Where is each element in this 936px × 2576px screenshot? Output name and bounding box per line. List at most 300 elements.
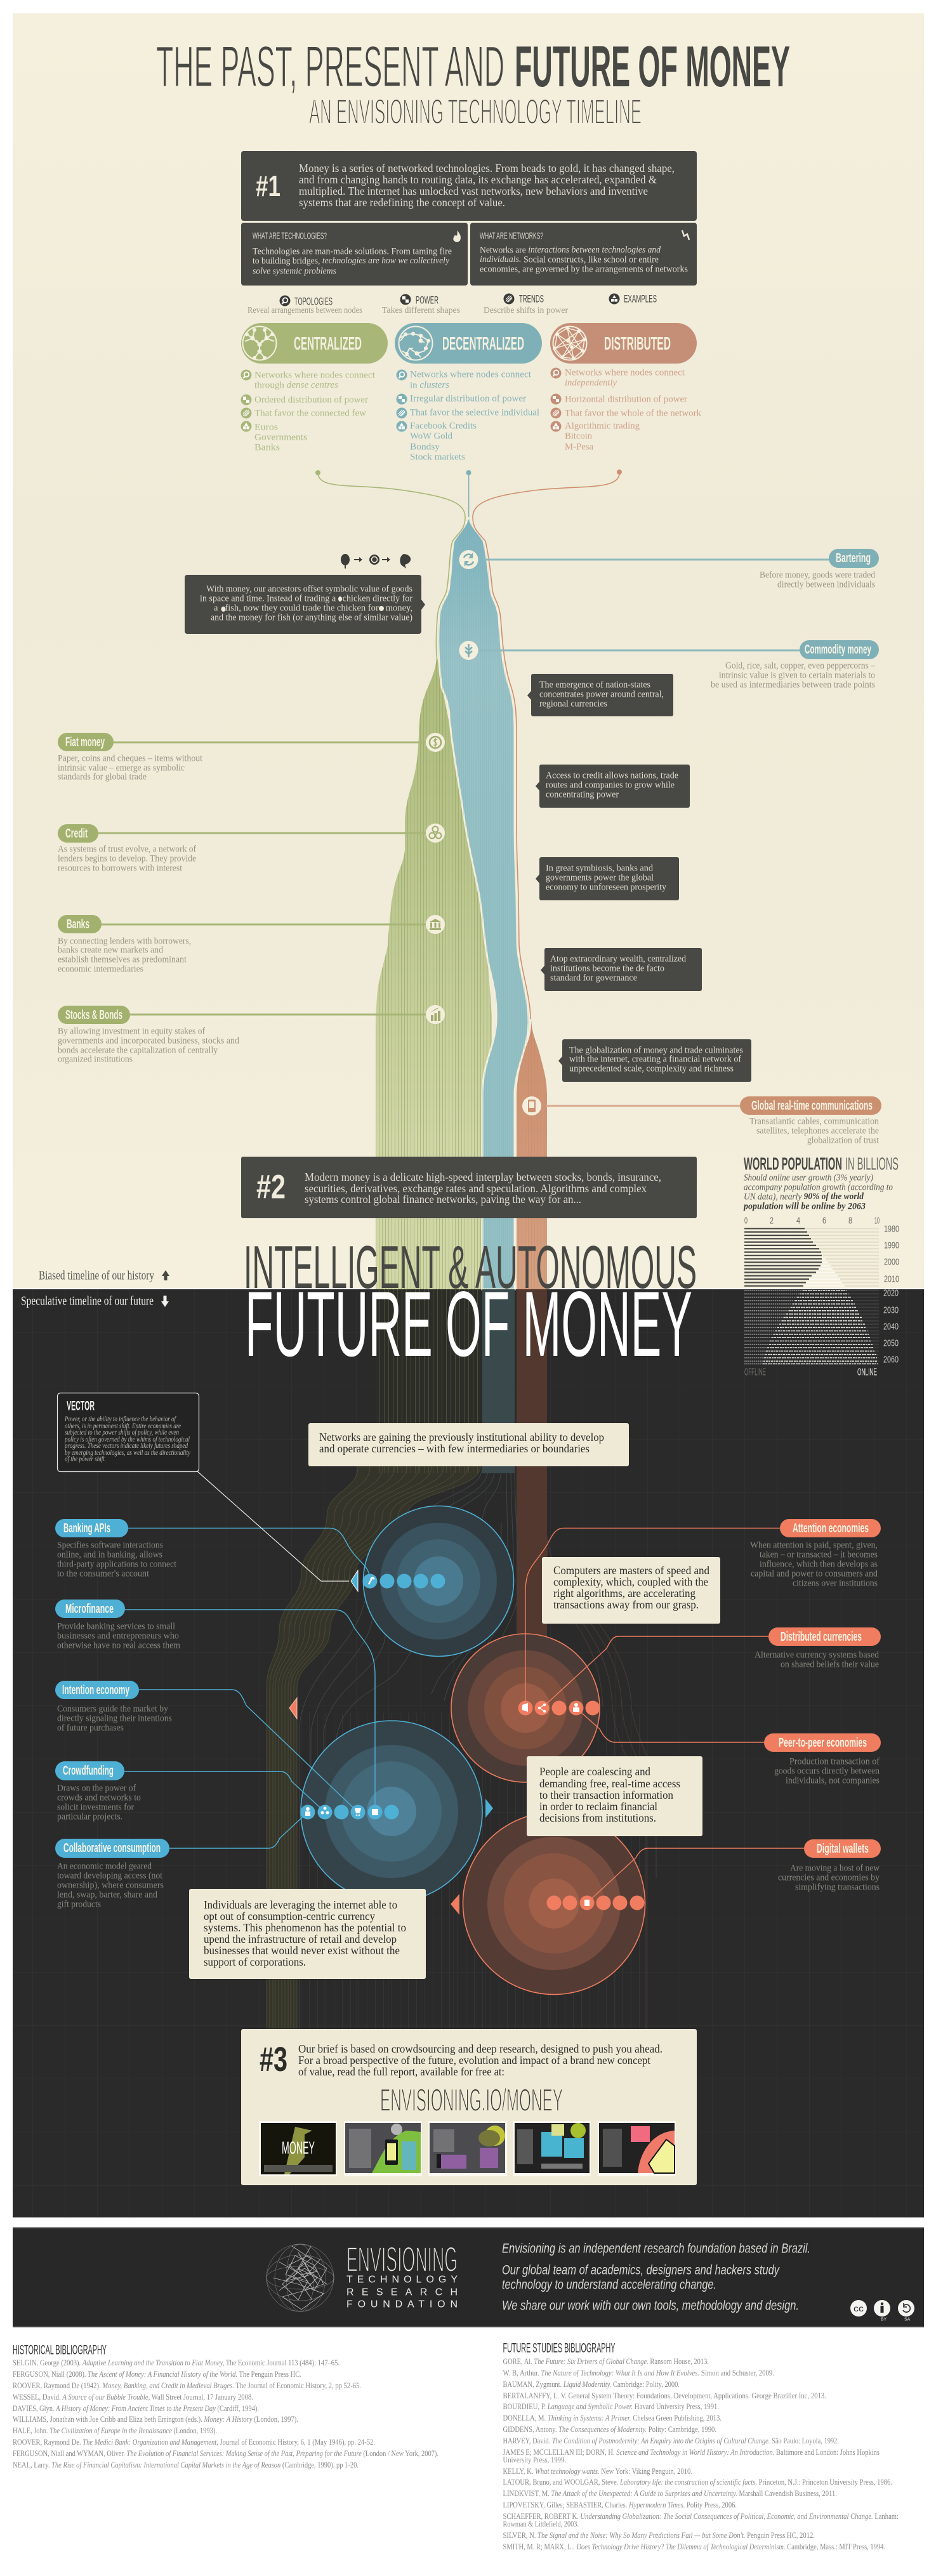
callout: credit access: concentrating power (546, 789, 619, 799)
panel: #2 modern money (241, 1157, 697, 1218)
pill (55, 1519, 128, 1537)
nodes: crowd cluster dots (301, 1804, 399, 1820)
panel: vector explanation: VECTOR (67, 1398, 95, 1414)
icon: flame (453, 230, 461, 242)
description (711, 660, 876, 690)
stream: distributed orange (517, 1019, 547, 1289)
topology pill: distributed (550, 323, 697, 364)
callout: credit access: routes and companies to grow while (546, 780, 675, 790)
list: distributed properties: independently (565, 378, 617, 388)
foundation description (502, 2241, 810, 2313)
year labels (883, 1223, 899, 1365)
icon: chicken, coin, fish exchange (341, 554, 411, 568)
callout: symbolic value: and the money for fish (or anything else of similar value) (211, 612, 412, 622)
panel: vector explanation: Power, or the ability to influence the behavior of (64, 1414, 176, 1423)
panel: vector explanation: subjected to the power shifts of policy, while even (65, 1428, 179, 1436)
panel: footer: ENVISIONING (346, 2239, 458, 2279)
icon: people, cart, target (305, 1807, 378, 1816)
stream: centralized green (376, 654, 492, 1289)
icon: wallet (584, 1900, 590, 1906)
callout: computers (542, 1557, 720, 1624)
bibliography: future studies: GORE, Al. The Future: Six Drivers of Global Change. Ransom House, 2013. (503, 2356, 709, 2366)
heading: #3: #3 (260, 2040, 287, 2079)
foundation description: We share our work with our own tools, methodology and design. (502, 2298, 799, 2313)
logo wordmark: TECHNOLOGY (346, 2274, 458, 2285)
description: Are moving a host of new (790, 1863, 880, 1873)
panel: vector explanation: policy is often governed by the whims of technological (64, 1435, 190, 1443)
description: economic intermediaries (58, 964, 143, 974)
chart description (742, 1173, 893, 1211)
panel: dark background future section (13, 1288, 924, 2218)
legend: topologies, power, trends, examples: EXAMPLES (624, 293, 657, 305)
legend offline online: OFFLINE (744, 1367, 766, 1378)
pill (764, 1733, 881, 1752)
bibliography: future studies: HARVEY, David. The Condition of Postmodernity: An Enquiry into the Origins of Cultural Change. São Paulo: Loyola, 1992. (503, 2436, 839, 2445)
vector arrow left (289, 1698, 297, 1719)
bibliography: future studies: SMITH, M. R; MARX, L.. Does Technology Drive History? The Dilemma of Technological Determinism. Cambridge, Mass.: MIT Press, 1994. (503, 2542, 885, 2551)
description: individuals, not companies (786, 1775, 880, 1785)
axis values: 4 (796, 1216, 800, 1226)
description: banks create new markets and (58, 945, 164, 955)
callout: institutions: Atop extraordinary wealth, centralized (550, 954, 686, 964)
description (58, 844, 196, 873)
intro text: Money is a series of networked technologies. From beads to gold, it has changed shape, (299, 162, 675, 174)
callout: symbiosis: governments power the global (546, 872, 654, 883)
description: ownership), where consumers (57, 1880, 164, 1890)
future item: distributed currencies (755, 1627, 881, 1669)
description (58, 1026, 240, 1064)
panel: paper background past section (13, 13, 924, 1289)
connector lines blue (124, 1528, 375, 1848)
pill: Intention economy (62, 1683, 130, 1697)
year labels: 2010 (884, 1274, 899, 1284)
callout: networks gaining: and operate currencies – with few intermediaries or boundaries (319, 1442, 590, 1455)
topology pill: decentralized (395, 323, 542, 364)
bibliography: future studies: JAMES E; MCCLELLAN III; DORN, H. Science and Technology in World History: An Introduction. Baltimore and London: Johns Hopkins (503, 2447, 880, 2457)
list: decentralized properties: in clusters (410, 380, 449, 390)
icon: bank (426, 915, 445, 934)
milestone: commodity money (459, 640, 879, 690)
description: intrinsic value – emerge as symbolic (58, 763, 185, 773)
history timeline label: Biased timeline of our history (39, 1269, 154, 1283)
future item: peer-to-peer economies (764, 1733, 881, 1785)
axis values: 2 (770, 1216, 774, 1226)
pill (804, 1839, 881, 1858)
panel: #3 call to action: ENVISIONING.IO/MONEY (380, 2082, 563, 2118)
bibliography: historical (13, 2343, 438, 2469)
bibliography: historical: WILLIAMS, Jonathan with Joe Cribb and Eliza beth Errington (eds.). Money: A History (London, 1997). (13, 2414, 298, 2424)
chart title: WORLD POPULATION (744, 1153, 842, 1174)
callout: symbolic value: in space and time. Instead of trading a chicken directly for (200, 593, 412, 603)
bibliography: future studies: LATOUR, Bruno, and WOOLGAR, Steve. Laboratory life: the construction of scientific facts. Princeton, N.J.: Princeton University Press, 1986. (503, 2477, 892, 2487)
pill: Bartering: Bartering (836, 551, 871, 565)
description: goods occurs directly between (774, 1766, 880, 1776)
report text: For a broad perspective of the future, evolution and impact of a brand new concept (298, 2054, 650, 2067)
description: directly signaling their intentions (57, 1713, 172, 1723)
list: decentralized properties: Networks where nodes connect (410, 369, 532, 379)
blue circle: banking cluster (363, 1506, 514, 1656)
milestone: credit (58, 824, 445, 873)
callout: individuals: support of corporations. (204, 1955, 306, 1968)
topology pill: decentralized: DECENTRALIZED (442, 334, 524, 354)
icon: wheat (459, 641, 478, 660)
pill: Digital wallets (817, 1842, 869, 1856)
description: establish themselves as predominant (58, 954, 187, 964)
description: As systems of trust evolve, a network of (58, 844, 196, 854)
callout: symbolic value (185, 575, 425, 634)
dark stream: straight section (376, 1289, 547, 1645)
description: satellites, telephones accelerate the (756, 1126, 879, 1136)
stream: decentralized blue (438, 513, 529, 1289)
bibliography: future studies: Rowman & Littlefield, 2003. (503, 2519, 579, 2528)
heading: #2: #2 (256, 1169, 286, 1206)
thumbnail: phone page (344, 2121, 422, 2176)
list: distributed properties: That favor the whole of the network (565, 408, 701, 418)
description: solicit investments for (57, 1802, 134, 1812)
list: centralized properties: Governments (254, 432, 307, 442)
description: bonds accelerate the capitalization of centrally (58, 1045, 218, 1055)
description: Draws on the power of (57, 1783, 136, 1793)
legend offline online (744, 1367, 877, 1378)
bibliography: historical: NEAL, Larry. The Rise of Financial Capitalism: International Capital Markets in the Age of Reason (Cambridge, 1990). pp 1-20. (13, 2460, 359, 2469)
list: decentralized properties: Stock markets (410, 452, 465, 462)
callout: individuals: Individuals are leveraging the internet able to (204, 1898, 397, 1911)
bibliography: historical: FERGUSON, Niall and WYMAN, Oliver. The Evolution of Financial Services: Making Sense of the Past, Preparing for the Future (London / New York, 2007). (13, 2448, 438, 2458)
online bars (803, 1256, 845, 1286)
description: globalization of trust (807, 1135, 879, 1145)
report text: of value, read the full report, available for free at: (298, 2065, 504, 2078)
panel: what are networks: economies, are governed by the arrangements of networks (480, 264, 688, 274)
bibliography: future studies: FUTURE STUDIES BIBLIOGRAPHY (503, 2341, 616, 2355)
vector arrow right (485, 1799, 493, 1818)
callout: symbiosis: In great symbiosis, banks and (546, 863, 653, 873)
panel: what are technologies: to building bridges, technologies are how we collectively (253, 256, 449, 266)
description (778, 1863, 880, 1892)
callout: networks gaining: Networks are gaining the previously institutional ability to develop (319, 1431, 604, 1443)
bibliography: future studies: SCHAEFFER, ROBERT K. Understanding Globalization: The Social Consequences of Political, Economic, and Environmental Change. Lanham: (503, 2511, 899, 2521)
title: THE PAST, PRESENT AND (156, 35, 504, 99)
offline dotted bars (744, 1291, 803, 1364)
list: distributed properties (551, 367, 701, 452)
legend offline online: ONLINE (857, 1367, 877, 1378)
legend: topologies, power, trends, examples: Takes different shapes (382, 306, 460, 315)
legend: topologies, power, trends, examples: TRENDS (519, 293, 544, 305)
legend: topologies, power, trends, examples: POWER (416, 294, 438, 306)
list: centralized properties: Banks (254, 442, 280, 452)
description: Consumers guide the market by (57, 1704, 169, 1714)
list: decentralized properties: That favor the selective individual (410, 407, 539, 417)
description: taken – or transacted – it becomes (760, 1549, 878, 1560)
thumbnail: blue cards page (513, 2121, 591, 2176)
pill: Fiat money (58, 733, 114, 751)
bibliography: future studies: KELLY, K. What technology wants. New York: Viking Penguin, 2010. (503, 2466, 692, 2476)
year labels: 2030 (883, 1304, 899, 1316)
callout: globalization (558, 1039, 751, 1082)
callout: computers: complexity, which, coupled with the (553, 1575, 708, 1588)
description: directly between individuals (777, 579, 875, 589)
bibliography: future studies: W. B, Arthur. The Nature of Technology: What It Is and How It Evolves. Simon and Schuster, 2009. (503, 2368, 774, 2377)
description (774, 1756, 880, 1785)
panel: intro #1 (241, 151, 697, 221)
dark stream: green lines moving left (267, 1466, 480, 2028)
tracks dark (744, 1291, 879, 1364)
description (57, 1861, 164, 1909)
logo wordmark (346, 2239, 458, 2310)
axis values: 0 (744, 1216, 748, 1226)
pill: Credit: Credit (65, 827, 88, 841)
pill: Fiat money: Fiat money (65, 735, 105, 749)
milestone: global real-time communications (522, 1096, 881, 1145)
panel: what are technologies: Technologies are man-made solutions. From taming fire (253, 246, 452, 256)
description: capital and power to consumers and (751, 1568, 878, 1579)
bibliography: future studies: BAUMAN, Zygmunt. Liquid Modernity. Cambridge: Polity, 2000. (503, 2379, 680, 2389)
bibliography: future studies: BERTALANFFY, L. V. General System Theory: Foundations, Development, Applications. George Braziller Inc, 2013. (503, 2391, 826, 2400)
list: centralized properties: Ordered distribution of power (254, 395, 368, 405)
thumbnail: cover (259, 2121, 337, 2176)
list: distributed properties: M-Pesa (565, 442, 593, 452)
callout: symbiosis (536, 857, 679, 900)
bibliography: future studies: SILVER, N. The Signal and the Noise: Why So Many Predictions Fail — but Some Don't. Penguin Press HC, 2012. (503, 2530, 815, 2540)
foundation description: Our global team of academics, designers and hackers study (502, 2263, 780, 2278)
callout: networks gaining (308, 1423, 629, 1466)
icon: network link (682, 230, 689, 240)
callout: computers: transactions away from our grasp. (553, 1598, 699, 1611)
callout: institutions: standard for governance (550, 973, 637, 983)
description (755, 1650, 880, 1669)
panel: what are networks: Networks are interactions between technologies and (480, 245, 661, 255)
description (57, 1783, 141, 1822)
callout: credit access: Access to credit allows nations, trade (546, 770, 678, 780)
pill (55, 1681, 139, 1699)
bibliography: historical: FERGUSON, Niall (2008). The Ascent of Money: A Financial History of the World. The Penguin Press HC. (13, 2369, 301, 2379)
icon: credit trio (426, 824, 445, 843)
callout: computers: Computers are masters of speed and (553, 1564, 709, 1577)
year labels: 2040 (883, 1321, 899, 1332)
description: of future purchases (57, 1723, 124, 1733)
description: Gold, rice, salt, copper, even peppercorns – (725, 660, 876, 671)
callout: institutions (541, 948, 702, 991)
milestone: stocks and bonds (58, 1005, 445, 1064)
callout: globalization: with the internet, creating a financial network of (569, 1054, 741, 1064)
description: standards for global trade (58, 772, 147, 782)
pill: Commodity money (800, 640, 879, 659)
topology pill: centralized (241, 323, 388, 364)
tracks (744, 1228, 879, 1286)
root: blue line with dot (466, 470, 471, 517)
online dotted bars (763, 1291, 878, 1364)
callout: people: People are coalescing and (539, 1765, 650, 1778)
future item: collaborative consumption (55, 1839, 169, 1909)
icons: creative commons: SA (904, 2317, 911, 2322)
panel: #2 modern money: securities, derivatives, exchange rates and speculation. Algorithms and complex (305, 1182, 647, 1195)
list: distributed properties: Bitcoin (565, 431, 592, 441)
pill: Banking APIs (63, 1521, 110, 1535)
panel: #2 modern money: Modern money is a delicate high-speed interplay between stocks, bonds, insurance, (305, 1171, 661, 1183)
description: be used as intermediaries between trade points (711, 680, 875, 690)
callout: nation-states: regional currencies (539, 699, 607, 709)
panel: #3 call to action (241, 2029, 697, 2185)
callout: nation-states (527, 674, 673, 716)
bibliography: future studies: DONELLA, M. Thinking in Systems: A Primer. Chelsea Green Publishing, 2013. (503, 2413, 722, 2422)
description: influence, which then develops as (760, 1559, 878, 1569)
panel: what are technologies: solve systemic problems (253, 266, 336, 276)
milestone: fiat money (58, 733, 445, 782)
list: decentralized properties: WoW Gold (410, 431, 452, 441)
future item: banking APIs (55, 1519, 176, 1579)
icons: creative commons: BY (881, 2317, 887, 2322)
pill: Microfinance (65, 1602, 114, 1616)
description: particular projects. (57, 1811, 122, 1822)
dark stream: blue lines fanning out (298, 1466, 645, 2028)
blue circle: crowd cluster (301, 1721, 493, 1902)
dark stream: orange lines fanning out (547, 1535, 664, 2028)
bibliography: historical: SELGIN, George (2003). Adaptive Learning and the Transition to Fiat Money, The Economic Journal 113 (484): 147–65. (13, 2358, 339, 2367)
callout: individuals: opt out of consumption-centric currency (204, 1910, 375, 1922)
panel: vector explanation (57, 1393, 199, 1472)
callout: symbolic value: a fish, now they could trade the chicken for money, (214, 603, 412, 613)
chart: world population: 10 (874, 1216, 880, 1226)
intro text: systems that are redefining the concept of value. (299, 196, 505, 209)
pill: Collaborative consumption (63, 1841, 161, 1855)
future timeline label: Speculative timeline of our future (21, 1294, 154, 1308)
pill: Attention economies (793, 1521, 869, 1535)
pill: Global real-time communications (740, 1096, 881, 1115)
description: Paper, coins and cheques – items without (58, 753, 202, 763)
pill: Banks (58, 915, 102, 933)
offline bars (744, 1228, 822, 1286)
future item: digital wallets (778, 1839, 881, 1892)
year labels: 1990 (884, 1240, 899, 1251)
description: businesses and entrepreneurs who (57, 1631, 179, 1641)
bibliography: future studies: University Press, 1999. (503, 2455, 566, 2464)
callout: individuals: systems. This phenomenon has the potential to (204, 1921, 406, 1934)
callout: globalization: unprecedented scale, complexity and richness (569, 1063, 734, 1074)
bibliography: future studies: LINDKVIST, M. The Attack of the Unexpected: A Guide to Surprises and Uncertainty. Marshall Cavendish Business, 2011. (503, 2488, 837, 2498)
legend: topologies, power, trends, examples: Describe shifts in power (484, 306, 568, 315)
panel: #2 modern money: systems control global finance networks, paving the way for an... (305, 1193, 581, 1206)
legend: topologies, power, trends, examples: Reveal arrangements between nodes (247, 306, 362, 315)
callout: individuals (189, 1889, 426, 1979)
thumbnail: car page (428, 2121, 507, 2176)
topology pill: distributed: DISTRIBUTED (604, 334, 671, 354)
description: By connecting lenders with borrowers, (58, 936, 191, 946)
bibliography: future studies: BOURDIEU, P. Language and Symbolic Power. Havard University Press, 1991. (503, 2402, 719, 2411)
icons: creative commons: cc (854, 2303, 864, 2313)
pill: Crowdfunding (63, 1764, 114, 1778)
future item: intention economy (55, 1681, 172, 1733)
description (750, 1540, 878, 1588)
description: on shared beliefs their value (781, 1659, 879, 1669)
description (57, 1704, 172, 1733)
chart description: UN data), nearly 90% of the world (744, 1192, 864, 1202)
icon: phone (522, 1096, 541, 1115)
panel: vector explanation: of the power shift. (65, 1454, 106, 1463)
axis values (744, 1216, 880, 1226)
chart description: Should online user growth (3% yearly) (744, 1173, 873, 1183)
connector lines orange (525, 1528, 804, 1903)
chart: world population (742, 1153, 899, 1378)
report text: Our brief is based on crowdsourcing and deep research, designed to push you ahead. (298, 2042, 662, 2055)
thumbnail: tablet page (598, 2121, 676, 2176)
description: organized institutions (58, 1054, 133, 1064)
year labels: 2020 (883, 1288, 899, 1298)
pill: Peer-to-peer economies (779, 1736, 867, 1750)
panel: footer (13, 2227, 924, 2327)
panel: what are networks (470, 223, 697, 286)
description: lenders begins to develop. They provide (58, 853, 196, 864)
intro text: multiplied. The internet has unlocked vast networks, new behaviors and inventive (299, 185, 648, 197)
description: simplifying transactions (795, 1882, 880, 1892)
list: centralized properties: through dense centres (254, 380, 338, 390)
pill (55, 1839, 169, 1858)
description: An economic model geared (57, 1861, 152, 1871)
callout: nation-states: concentrates power around central, (539, 689, 664, 699)
description: to the consumer's account (57, 1568, 149, 1579)
panel: what are networks: individuals. Social constructs, like school or entire (480, 254, 659, 265)
list: decentralized properties: Bondsy (410, 442, 440, 452)
bibliography: future studies (503, 2341, 899, 2551)
description (57, 1621, 181, 1650)
future item: microfinance (55, 1600, 181, 1650)
callout: credit access (536, 765, 690, 808)
description: Transatlantic cables, communication (749, 1116, 880, 1126)
vector arrow left (451, 1894, 459, 1915)
description: Production transaction of (789, 1756, 880, 1766)
thumbnail: cover: MONEY (282, 2138, 315, 2157)
list: distributed properties: Horizontal distribution of power (565, 394, 687, 404)
icon: exchange arrows (459, 550, 478, 569)
foundation description: Envisioning is an independent research foundation based in Brazil. (502, 2241, 810, 2256)
callout: people (527, 1756, 702, 1836)
legend: topologies, power, trends, examples (247, 293, 657, 315)
description (58, 753, 202, 782)
axis values: 6 (822, 1216, 826, 1226)
heading: #1: #1 (256, 169, 280, 202)
chart description: accompany population growth (according to (744, 1182, 893, 1192)
description: Provide banking services to small (57, 1621, 175, 1631)
description: crowds and networks to (57, 1792, 141, 1803)
description: When attention is paid, spent, given, (750, 1540, 878, 1550)
callout: people: to their transaction information (539, 1789, 673, 1801)
pill: Stocks and Bonds (58, 1006, 130, 1024)
intro text: and from changing hands to routing data, its exchange has accelerated, expanded & (299, 173, 657, 186)
description: citizens over institutions (793, 1578, 878, 1588)
legend: topologies, power, trends, examples: TOPOLOGIES (294, 296, 333, 307)
callout: people: in order to reclaim financial (539, 1800, 657, 1813)
description (760, 570, 876, 589)
pill: Stocks and Bonds: Stocks & Bonds (65, 1008, 122, 1022)
pill: Banks: Banks (67, 917, 89, 931)
description: online, and in banking, allows (57, 1549, 162, 1560)
pill: Distributed currencies (781, 1630, 862, 1644)
report text (298, 2042, 662, 2078)
nodes: banking cluster dots (351, 1570, 445, 1591)
icon: coin (426, 733, 445, 752)
year labels: 2050 (883, 1337, 899, 1349)
pill (55, 1600, 125, 1618)
logo wordmark: RESEARCH (346, 2287, 458, 2298)
pill: Credit (58, 824, 98, 843)
bibliography: historical: HISTORICAL BIBLIOGRAPHY (13, 2343, 107, 2358)
callout: computers: right algorithms, are accelerating (553, 1587, 695, 1600)
description: toward developing access (not (57, 1870, 162, 1881)
bibliography: historical: ROOVER, Raymond De. The Medici Bank: Organization and Management, Journal of Economic History, 6, 1 (May 1946), pp. 24-52. (13, 2437, 375, 2447)
year labels: 2060 (883, 1354, 899, 1365)
bibliography: historical: ROOVER, Raymond De (1942). Money, Banking, and Credit in Medieval Bruges. The Journal of Economic History, 2, pp 52-65. (13, 2381, 361, 2390)
list: centralized properties: Euros (254, 422, 278, 432)
panel: what are networks: WHAT ARE NETWORKS? (480, 231, 543, 241)
pill (780, 1519, 881, 1537)
